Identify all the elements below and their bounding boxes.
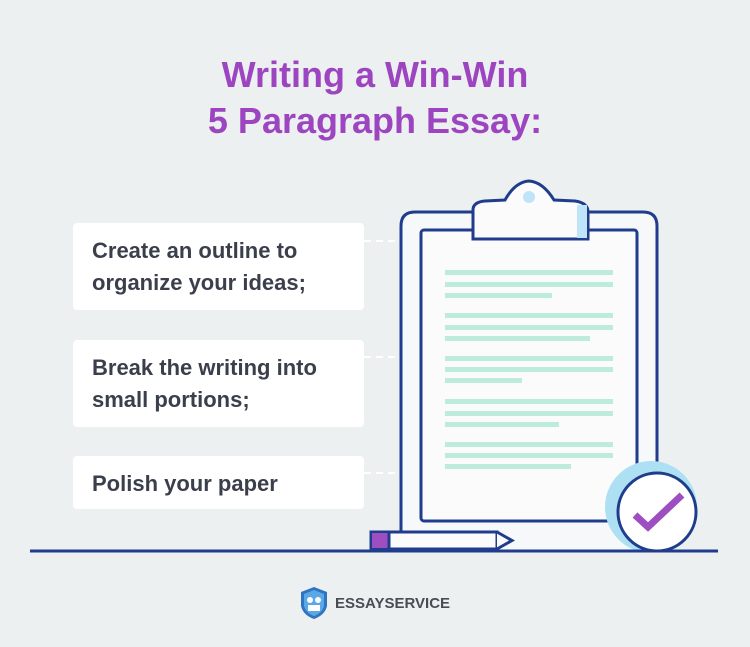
title: 5 Paragraph Essay: bbox=[208, 100, 542, 141]
text block: step 2: Break the writing into small portions; bbox=[92, 355, 317, 412]
text block: step 3: Polish your paper bbox=[92, 471, 278, 496]
clipboard board bbox=[401, 212, 657, 551]
pencil bbox=[371, 532, 512, 549]
logo bbox=[301, 587, 450, 619]
illustration: clipboard bbox=[30, 180, 718, 552]
text block: step 1 bbox=[73, 223, 364, 310]
text block: step 2 bbox=[73, 340, 364, 427]
icon: check circle bbox=[605, 461, 697, 553]
title bbox=[208, 54, 542, 141]
title: Writing a Win-Win bbox=[222, 54, 528, 95]
logo: ESSAYSERVICE bbox=[335, 595, 450, 612]
clip bbox=[473, 181, 588, 239]
text block: step 1: Create an outline to organize your ideas; bbox=[92, 238, 306, 295]
text block: step 3 bbox=[73, 456, 364, 509]
